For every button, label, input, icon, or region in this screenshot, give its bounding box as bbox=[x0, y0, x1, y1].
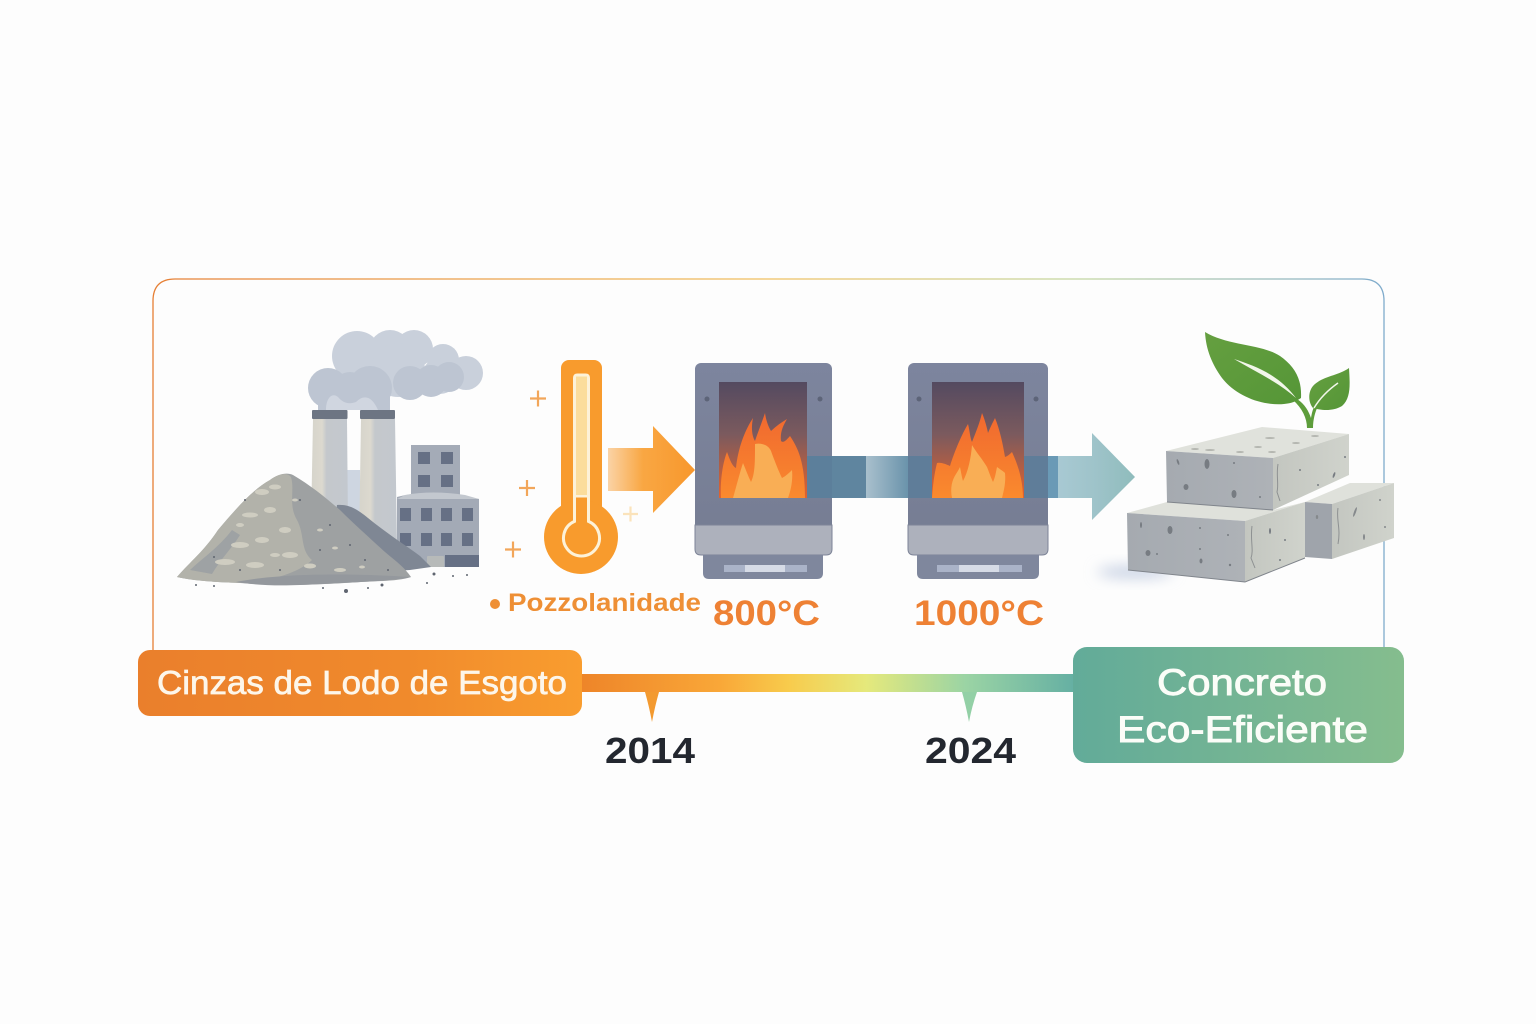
icon: factory with smoke and ash pile bbox=[177, 330, 483, 593]
year: 2014: 2014 bbox=[605, 730, 695, 771]
bottom block bbox=[1127, 502, 1305, 582]
year: 2024: 2024 bbox=[925, 730, 1016, 771]
icon: furnace 1000°C bbox=[908, 363, 1048, 579]
label: Concreto Eco-Eficiente: Eco-Eficiente bbox=[1117, 709, 1368, 750]
timeline bar bbox=[580, 674, 1075, 722]
marker: 2024 bbox=[962, 692, 977, 722]
label: Concreto Eco-Eficiente bbox=[1073, 647, 1404, 763]
icon: furnace 800°C bbox=[695, 363, 832, 579]
label: Pozzolanidade: Pozzolanidade bbox=[508, 589, 701, 617]
building bbox=[397, 445, 479, 567]
icon: concrete blocks with sprout bbox=[1097, 332, 1394, 582]
label: 1000°C: 1000°C bbox=[914, 594, 1044, 633]
label: 800°C: 800°C bbox=[713, 594, 820, 633]
shadow bbox=[1097, 566, 1173, 578]
light ash pile bbox=[177, 474, 468, 593]
flame bbox=[721, 413, 805, 498]
arrow: teal output arrow bbox=[1048, 433, 1135, 520]
panel frame bbox=[153, 279, 1384, 652]
arrow: orange heat arrow bbox=[608, 426, 695, 513]
marker: 2014 bbox=[645, 692, 659, 722]
top block bbox=[1166, 427, 1349, 510]
icon: plus signs bbox=[505, 390, 638, 558]
label: Cinzas de Lodo de Esgoto bbox=[138, 650, 582, 716]
sprout bbox=[1205, 332, 1350, 428]
label: Concreto Eco-Eficiente: Concreto bbox=[1157, 662, 1327, 703]
smoke cloud bbox=[308, 330, 483, 410]
chimneys bbox=[311, 410, 397, 545]
dark ash pile bbox=[335, 505, 431, 572]
icon: thermometer bbox=[544, 360, 618, 574]
label: Cinzas de Lodo de Esgoto: Cinzas de Lodo de Esgoto bbox=[157, 664, 567, 701]
arrow: band through furnaces bbox=[807, 456, 908, 498]
flame bbox=[932, 413, 1023, 498]
right block bbox=[1305, 483, 1394, 559]
